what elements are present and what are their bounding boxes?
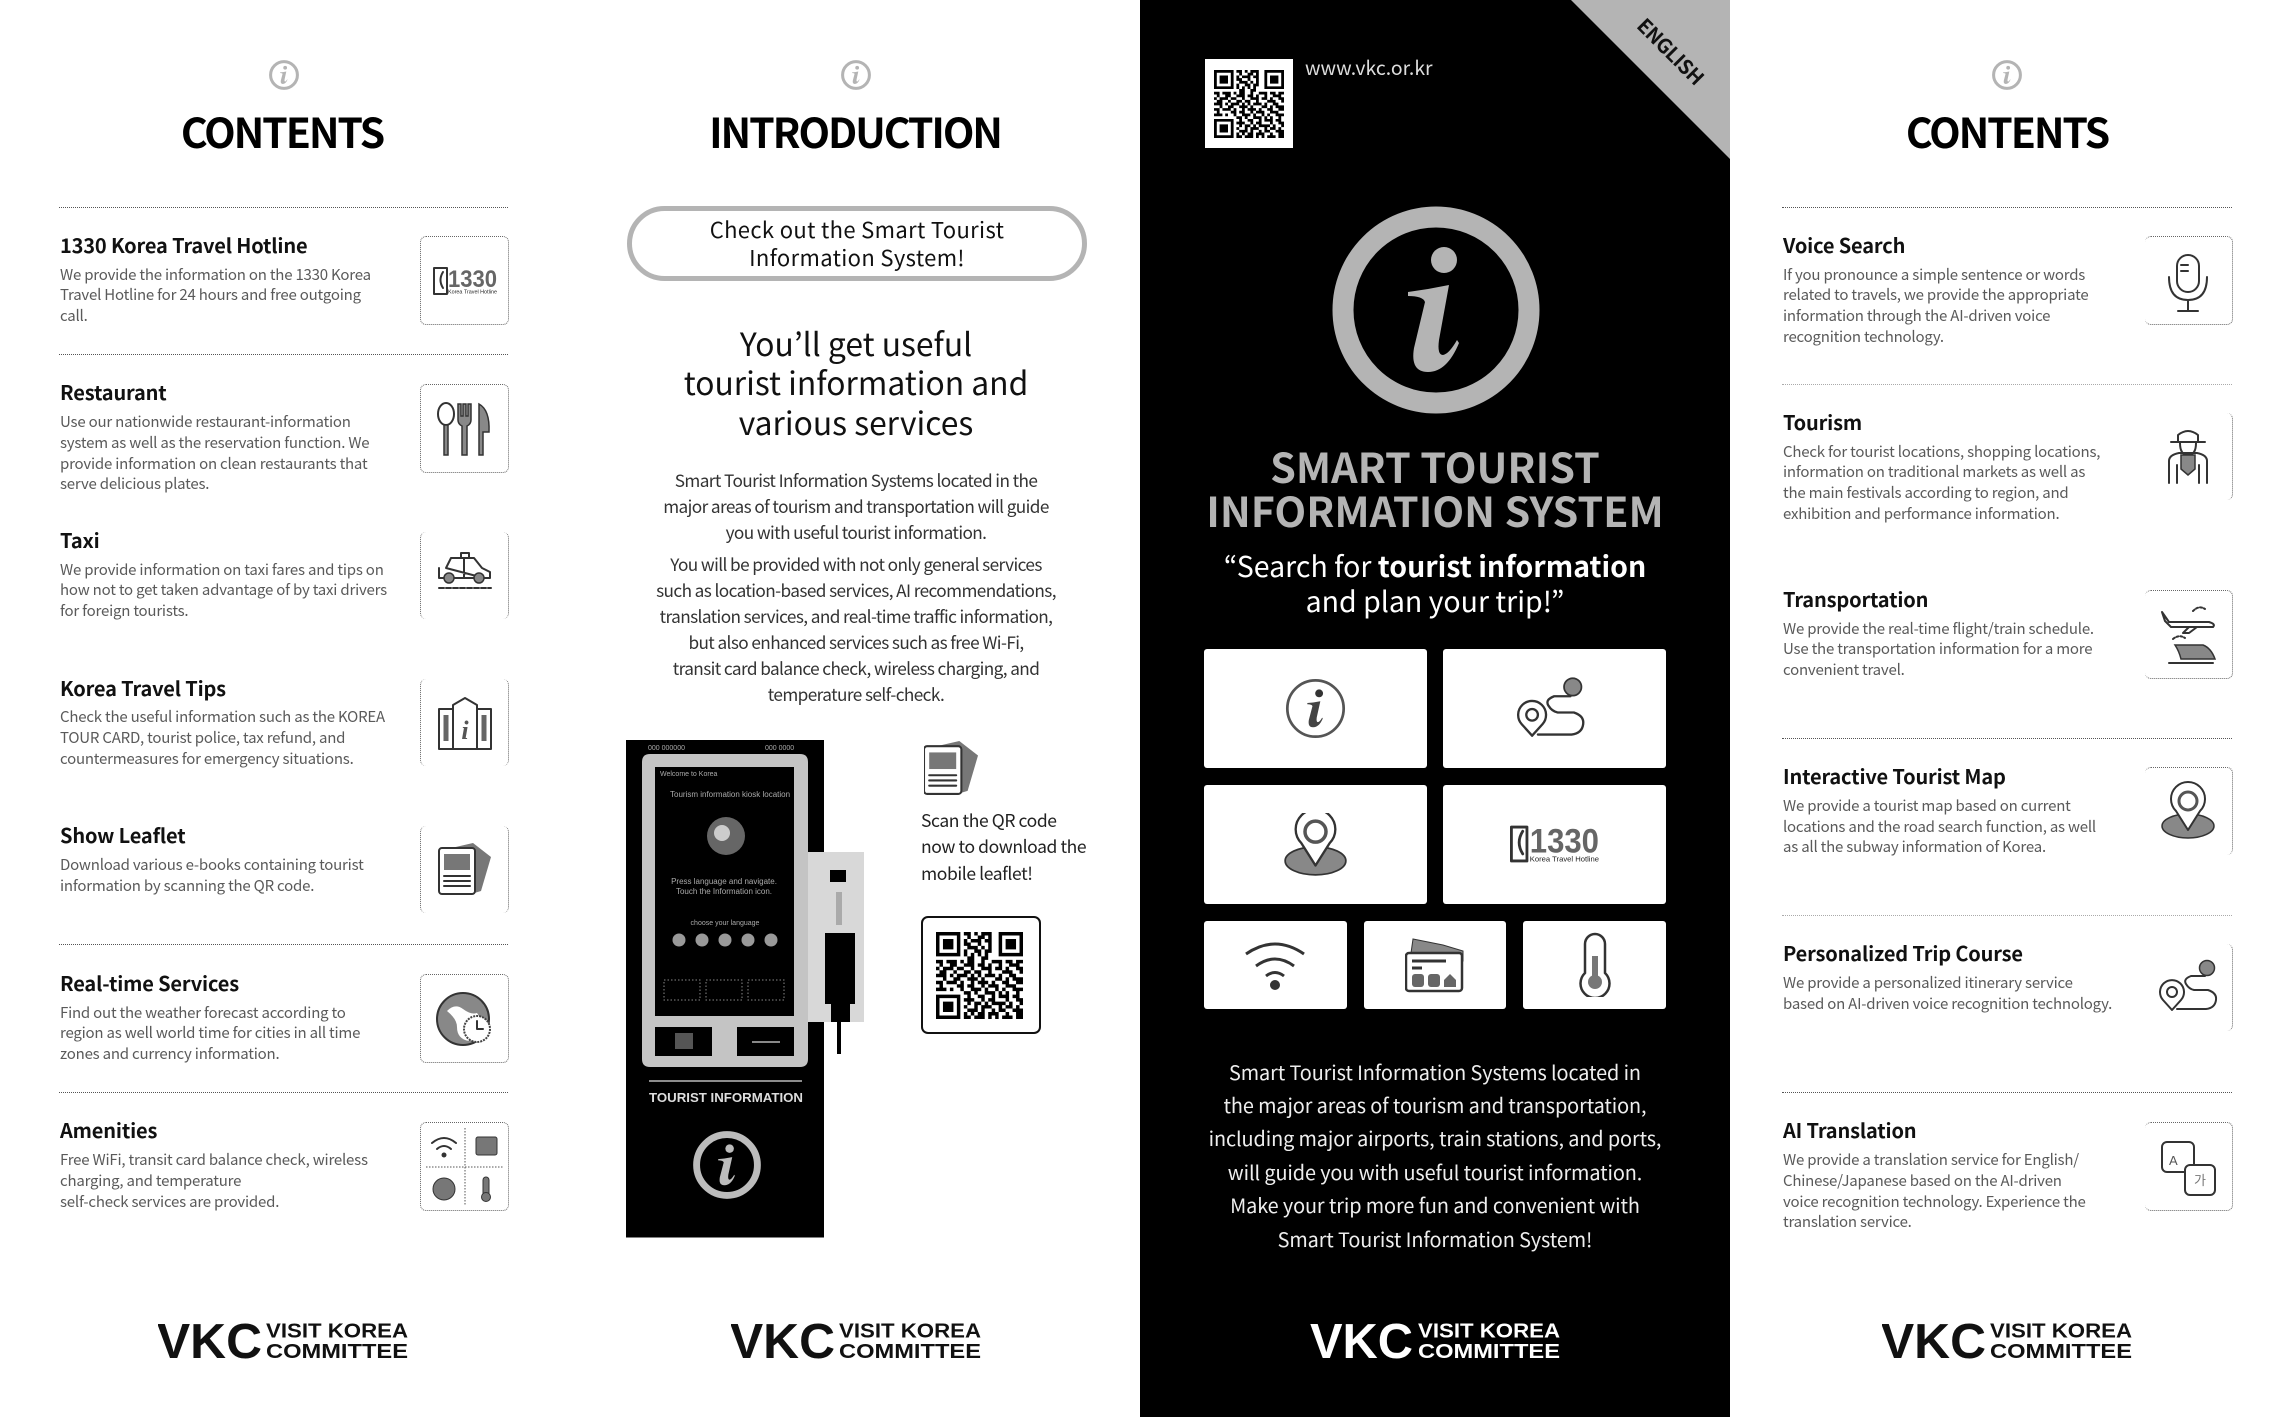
info icon [841, 60, 871, 90]
item: Show Leaflet [60, 820, 509, 913]
item: AI Translation: Chinese/Japanese based on the AI-driven [1783, 1170, 2062, 1191]
item: Show Leaflet: information by scanning the QR code. [60, 875, 314, 896]
item: 1330 Korea Travel Hotline [60, 230, 509, 326]
panel: contents left [59, 60, 509, 1360]
text: scan prompt: Scan the QR code [921, 808, 1057, 832]
icon: 1330: Korea Travel Hotline [448, 290, 497, 296]
item: Transportation: convenient travel. [1783, 659, 1905, 680]
icon: microphone [2144, 236, 2232, 325]
item: Real-time Services [60, 968, 509, 1064]
item: Amenities: Free WiFi, transit card balance check, wireless [60, 1149, 368, 1170]
item: Taxi: Taxi [60, 525, 100, 554]
text: cover paragraph [1209, 1056, 1661, 1253]
panel: contents right [1782, 60, 2233, 1360]
item: Tourism: Check for tourist locations, shopping locations, [1783, 441, 2100, 462]
icon: 1330: 1330 [448, 266, 497, 293]
heading: contents: CONTENTS [1906, 100, 2108, 160]
icon: cutlery [420, 384, 509, 473]
title: SMART TOURIST [1270, 435, 1600, 495]
item: 1330 Korea Travel Hotline: We provide the information on the 1330 Korea [60, 264, 371, 284]
item: Taxi [60, 525, 509, 621]
kiosk illustration: Welcome to Korea [660, 771, 718, 778]
item: Transportation: Transportation [1783, 584, 1928, 613]
item: Personalized Trip Course [1783, 938, 2233, 1031]
item: Tourism [1783, 407, 2233, 524]
text: intro paragraph 2: temperature self-check. [768, 680, 944, 706]
kiosk illustration: Press language and navigate. [671, 877, 777, 886]
icon: plane and train [2144, 590, 2232, 679]
item: Voice Search: Voice Search [1783, 230, 1905, 259]
card: transit card [1364, 921, 1506, 1009]
item: Show Leaflet: Show Leaflet [60, 820, 185, 849]
logo: VKC [731, 1322, 981, 1360]
text: scan prompt: now to download the [921, 834, 1086, 859]
text: cover paragraph: Smart Tourist Information System! [1278, 1224, 1592, 1253]
text: scan prompt: mobile leaflet! [921, 861, 1033, 886]
icon: globe and clock [420, 974, 509, 1063]
slogan: “Search for tourist information [1224, 545, 1646, 586]
text: intro paragraph 1: major areas of tourism and transportation will guide [663, 492, 1049, 518]
item: Real-time Services: Real-time Services [60, 968, 239, 997]
icon: 1330 [420, 236, 509, 325]
QR code [1205, 59, 1293, 148]
text: intro paragraph 2: You will be provided with not only general services [670, 550, 1042, 576]
info icon [269, 60, 299, 90]
text: intro paragraph 2: translation services, and real-time traffic information, [660, 602, 1052, 628]
card: location pin [1204, 785, 1427, 904]
kiosk illustration: 000 000000 [648, 745, 685, 752]
icon: taxi [420, 532, 509, 619]
panel: cover (dark) [1140, 0, 1730, 1417]
slogan [1224, 545, 1646, 621]
item: Interactive Tourist Map: Interactive Tourist Map [1783, 761, 2006, 790]
item: Interactive Tourist Map [1783, 761, 2233, 857]
language corner tab [1571, 0, 1730, 159]
item: Show Leaflet: Download various e-books containing tourist [60, 854, 364, 875]
kiosk illustration: Tourism information kiosk location [670, 790, 790, 799]
card: wifi [1204, 921, 1347, 1009]
item: Restaurant: Restaurant [60, 377, 167, 406]
item: Voice Search: related to travels, we provide the appropriate [1783, 284, 2088, 305]
subheading: various services [739, 398, 973, 444]
text: intro paragraph 2: transit card balance check, wireless charging, and [673, 654, 1039, 680]
panel: introduction [626, 60, 1087, 1360]
text: intro paragraph 1: Smart Tourist Information Systems located in the [675, 466, 1037, 492]
item: Personalized Trip Course: Personalized Trip Course [1783, 938, 2023, 967]
icon: leaflet [924, 741, 978, 795]
text: cover paragraph: including major airports, train stations, and ports, [1209, 1123, 1661, 1152]
item: AI Translation: voice recognition technology. Experience the [1783, 1191, 2086, 1212]
kiosk illustration [626, 740, 864, 1238]
heading: introduction: INTRODUCTION [709, 100, 1001, 160]
icon: route [2144, 944, 2232, 1031]
text: intro paragraph 2 [656, 550, 1056, 706]
icon: tourist info building [420, 679, 509, 766]
icon: translation bubbles: A [2168, 1152, 2178, 1168]
item: Interactive Tourist Map: We provide a tourist map based on current [1783, 795, 2071, 816]
item: Real-time Services: region as well world time for cities in all time [60, 1022, 360, 1043]
item: Amenities: Amenities [60, 1115, 157, 1144]
item: Taxi: We provide information on taxi fares and tips on [60, 559, 384, 580]
item: Voice Search: recognition technology. [1783, 326, 1944, 347]
icon: tourist info building: i [461, 716, 469, 745]
text: ENGLISH: ENGLISH [1631, 11, 1711, 91]
item: Interactive Tourist Map: as all the subway information of Korea. [1783, 836, 2046, 857]
heading: contents: CONTENTS [181, 100, 383, 160]
item: Restaurant: system as well as the reservation function. We [60, 432, 369, 453]
icon: tourist guide [2144, 413, 2232, 500]
icon: leaflet [420, 826, 509, 913]
text: cover paragraph: Make your trip more fun and convenient with [1230, 1190, 1640, 1219]
item: Transportation: Use the transportation information for a more [1783, 638, 2092, 659]
callout pill [627, 206, 1087, 281]
text: intro paragraph 2: but also enhanced services such as free Wi-Fi, [688, 628, 1024, 654]
item: AI Translation: We provide a translation service for English/ [1783, 1149, 2079, 1170]
text: intro paragraph 1: you with useful tourist information. [726, 518, 986, 544]
kiosk illustration: choose your language [691, 920, 760, 927]
item: Korea Travel Tips [60, 673, 509, 769]
item: Amenities: charging, and temperature [60, 1170, 241, 1191]
subheading [684, 320, 1028, 444]
item: Restaurant: provide information on clean restaurants that [60, 453, 367, 474]
item: Voice Search: information through the AI-driven voice [1783, 305, 2050, 326]
item: AI Translation: translation service. [1783, 1211, 1912, 1232]
item: Korea Travel Tips: Check the useful information such as the KOREA [60, 706, 385, 727]
item: Amenities: self-check services are provided. [60, 1191, 279, 1212]
kiosk illustration: Touch the Information icon. [676, 887, 772, 896]
item: Transportation [1783, 584, 2233, 680]
item: Voice Search [1782, 230, 2233, 347]
item: Real-time Services: Find out the weather forecast according to [60, 1002, 346, 1022]
title: INFORMATION SYSTEM [1206, 479, 1664, 539]
icon: translation bubbles [2144, 1122, 2232, 1210]
item: 1330 Korea Travel Hotline: 1330 Korea Travel Hotline [60, 230, 307, 259]
card: information [1204, 649, 1427, 768]
item: Tourism: Tourism [1783, 407, 1862, 436]
large info icon [1332, 206, 1540, 414]
item: 1330 Korea Travel Hotline: call. [60, 305, 88, 326]
logo: VKC (white) [1310, 1322, 1560, 1360]
item: Tourism: the main festivals according to region, and [1783, 482, 2069, 503]
item: Restaurant: Use our nationwide restaurant-information [60, 411, 351, 432]
icon: location pin [2144, 767, 2232, 855]
icon: amenities grid [420, 1122, 509, 1211]
text: scan prompt [921, 808, 1086, 886]
item: 1330 Korea Travel Hotline: Travel Hotline for 24 hours and free outgoing [60, 284, 361, 305]
item: Transportation: We provide the real-time flight/train schedule. [1783, 618, 2094, 639]
info icon [1992, 60, 2022, 90]
item: Interactive Tourist Map: locations and the road search function, as well [1783, 816, 2096, 837]
subheading: You’ll get useful [740, 320, 972, 366]
logo: VKC [1882, 1322, 2132, 1360]
text: website: www.vkc.or.kr [1305, 52, 1433, 80]
card: 1330 [1443, 785, 1666, 904]
logo: VKC [158, 1322, 408, 1360]
text: intro paragraph 1 [663, 466, 1049, 544]
QR code box [921, 916, 1041, 1034]
kiosk illustration: 000 0000 [765, 745, 794, 752]
title [1206, 435, 1664, 539]
item: Taxi: for foreign tourists. [60, 600, 188, 621]
kiosk illustration: TOURIST INFORMATION [649, 1090, 803, 1105]
text: cover paragraph: the major areas of tourism and transportation, [1224, 1090, 1646, 1119]
item: Korea Travel Tips: Korea Travel Tips [60, 673, 226, 702]
text: cover paragraph: will guide you with useful tourist information. [1228, 1157, 1642, 1186]
item: Personalized Trip Course: based on AI-driven voice recognition technology. [1783, 993, 2112, 1014]
item: Korea Travel Tips: countermeasures for emergency situations. [60, 748, 354, 769]
item: Amenities [60, 1115, 509, 1212]
item: Voice Search: If you pronounce a simple sentence or words [1783, 264, 2085, 284]
item: Restaurant: serve delicious plates. [60, 473, 209, 494]
card: route [1443, 649, 1666, 768]
item: Korea Travel Tips: TOUR CARD, tourist police, tax refund, and [60, 727, 345, 748]
callout pill: Check out the Smart Tourist [710, 213, 1004, 245]
item: Taxi: how not to get taken advantage of by taxi drivers [60, 579, 387, 600]
item: AI Translation [1782, 1115, 2233, 1232]
text: intro paragraph 2: such as location-based services, AI recommendations, [656, 576, 1056, 602]
item: Personalized Trip Course: We provide a personalized itinerary service [1783, 972, 2073, 993]
slogan: and plan your trip!” [1306, 580, 1564, 621]
callout pill: Information System! [749, 240, 965, 272]
item: Restaurant [60, 377, 509, 494]
item: Tourism: information on traditional markets as well as [1783, 461, 2085, 482]
icon: translation bubbles: 가 [2194, 1170, 2206, 1188]
item: Tourism: exhibition and performance information. [1783, 503, 2059, 524]
card: thermometer [1523, 921, 1666, 1009]
item: AI Translation: AI Translation [1783, 1115, 1916, 1144]
text: cover paragraph: Smart Tourist Information Systems located in [1229, 1056, 1641, 1086]
subheading: tourist information and [684, 359, 1028, 405]
item: Real-time Services: zones and currency information. [60, 1043, 279, 1064]
